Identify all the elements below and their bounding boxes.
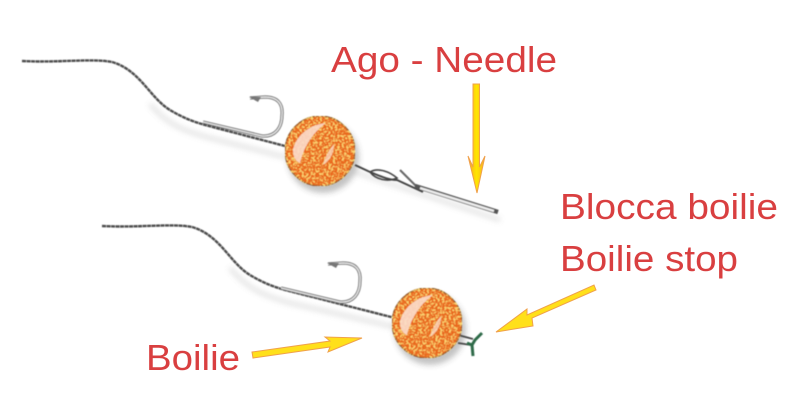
arrow: boilie stop <box>496 285 596 332</box>
hook <box>203 97 282 136</box>
shadow under top line <box>150 104 500 220</box>
hair loop <box>458 335 473 345</box>
shadow under bottom line <box>230 268 395 327</box>
braided hair line <box>22 60 285 146</box>
label: needle: Ago - Needle <box>331 39 557 80</box>
boilie stop <box>467 333 482 356</box>
arrow: boilie <box>252 337 362 358</box>
hook <box>281 263 360 302</box>
arrow: needle <box>468 84 485 193</box>
braided hair line <box>102 225 395 318</box>
rig: top, with needle <box>22 60 500 220</box>
rig: bottom, with boilie stop <box>102 225 482 365</box>
label: boilie stop (Italian): Blocca boilie <box>560 186 778 227</box>
bait: boilie <box>392 288 466 365</box>
label: boilie: Boilie <box>146 337 240 378</box>
bait: boilie <box>285 116 359 193</box>
label: boilie stop (English): Boilie stop <box>560 238 738 279</box>
needle <box>355 165 498 212</box>
